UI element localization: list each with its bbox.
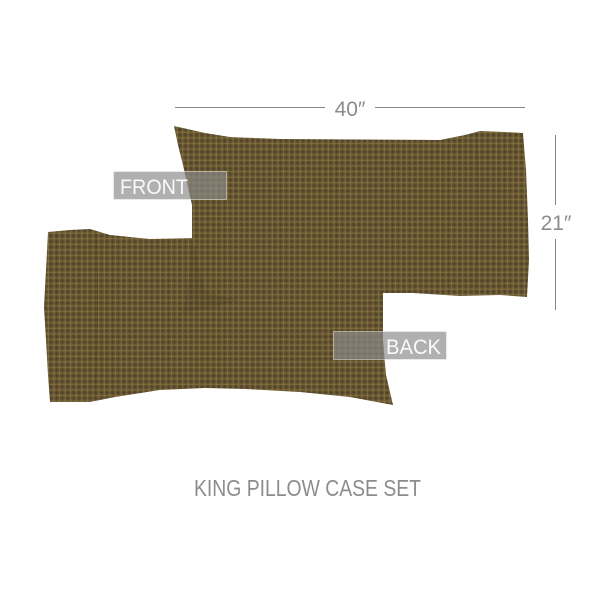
label: front <box>114 172 226 200</box>
front pillow corner shading <box>182 238 240 314</box>
label: back: BACK <box>386 336 441 359</box>
front pillow <box>174 126 529 314</box>
height label: 21″ <box>541 212 572 235</box>
front pillow cuff seam <box>474 133 479 295</box>
label: back <box>334 332 446 360</box>
back pillow cuff seam <box>94 231 98 400</box>
width label: 40″ <box>335 98 366 121</box>
caption: KING PILLOW CASE SET <box>194 475 421 501</box>
label: front: FRONT <box>120 176 188 199</box>
back pillow <box>44 229 393 405</box>
